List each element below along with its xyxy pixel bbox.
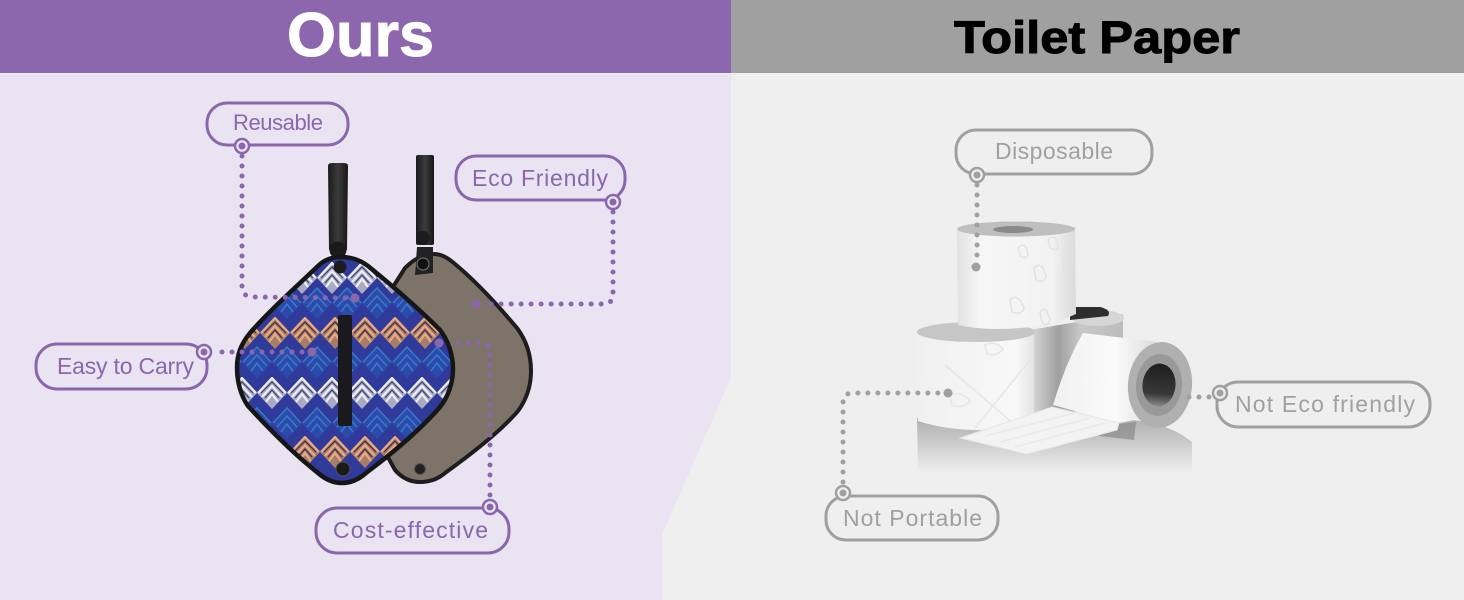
front pouch snaps [334, 260, 350, 476]
callout: Cost-effective [316, 338, 509, 553]
connector: Disposable [974, 185, 980, 258]
callout: Easy to Carry [36, 344, 316, 389]
header band: toilet paper [731, 0, 1464, 73]
right roll with tail sheet [960, 333, 1196, 454]
header band: ours [0, 0, 731, 73]
connector: Not Eco friendly [1179, 394, 1209, 400]
embossed hearts [1010, 237, 1070, 325]
callout: Eco Friendly [456, 156, 625, 308]
connector: Reusable [242, 156, 352, 298]
callout: Cost-effective: Cost-effective [333, 517, 488, 543]
front pouch binding [237, 257, 453, 483]
back pouch strap [415, 155, 434, 275]
front pouch center slit [338, 315, 352, 426]
left roll [917, 322, 1035, 430]
callout: Not Eco friendly [1179, 382, 1430, 427]
callout: Reusable: Reusable [233, 110, 323, 135]
connector: Not Portable [843, 393, 938, 482]
heading: Ours: Ours [287, 1, 434, 70]
connector: Cost-effective [449, 343, 490, 495]
back pouch snap tab [414, 253, 433, 474]
panel: toilet paper background [662, 74, 1464, 600]
floor reflection [917, 418, 1192, 472]
panel: ours background [0, 74, 731, 600]
callout: Not Portable [826, 388, 998, 540]
callout: Not Eco friendly: Not Eco friendly [1235, 391, 1416, 417]
back pouch: taupe side [340, 254, 531, 482]
top roll [957, 222, 1076, 329]
heading: Toilet Paper: Toilet Paper [954, 12, 1240, 63]
callout: Reusable [207, 103, 360, 302]
toilet paper photo [917, 222, 1196, 472]
front pouch: blue zigzag side [239, 259, 451, 481]
callout: Eco Friendly: Eco Friendly [472, 165, 608, 191]
callout: Not Portable: Not Portable [843, 505, 982, 531]
connector: Easy to Carry [222, 350, 312, 354]
product photo: reusable pouches [234, 155, 533, 486]
embossed pattern [945, 343, 1030, 428]
callout: Easy to Carry: Easy to Carry [57, 353, 194, 379]
connector: Eco Friendly [486, 212, 613, 304]
front pouch strap [328, 163, 348, 258]
callout: Disposable [956, 130, 1152, 272]
callout: Disposable: Disposable [995, 138, 1113, 164]
back roll [1030, 307, 1124, 430]
